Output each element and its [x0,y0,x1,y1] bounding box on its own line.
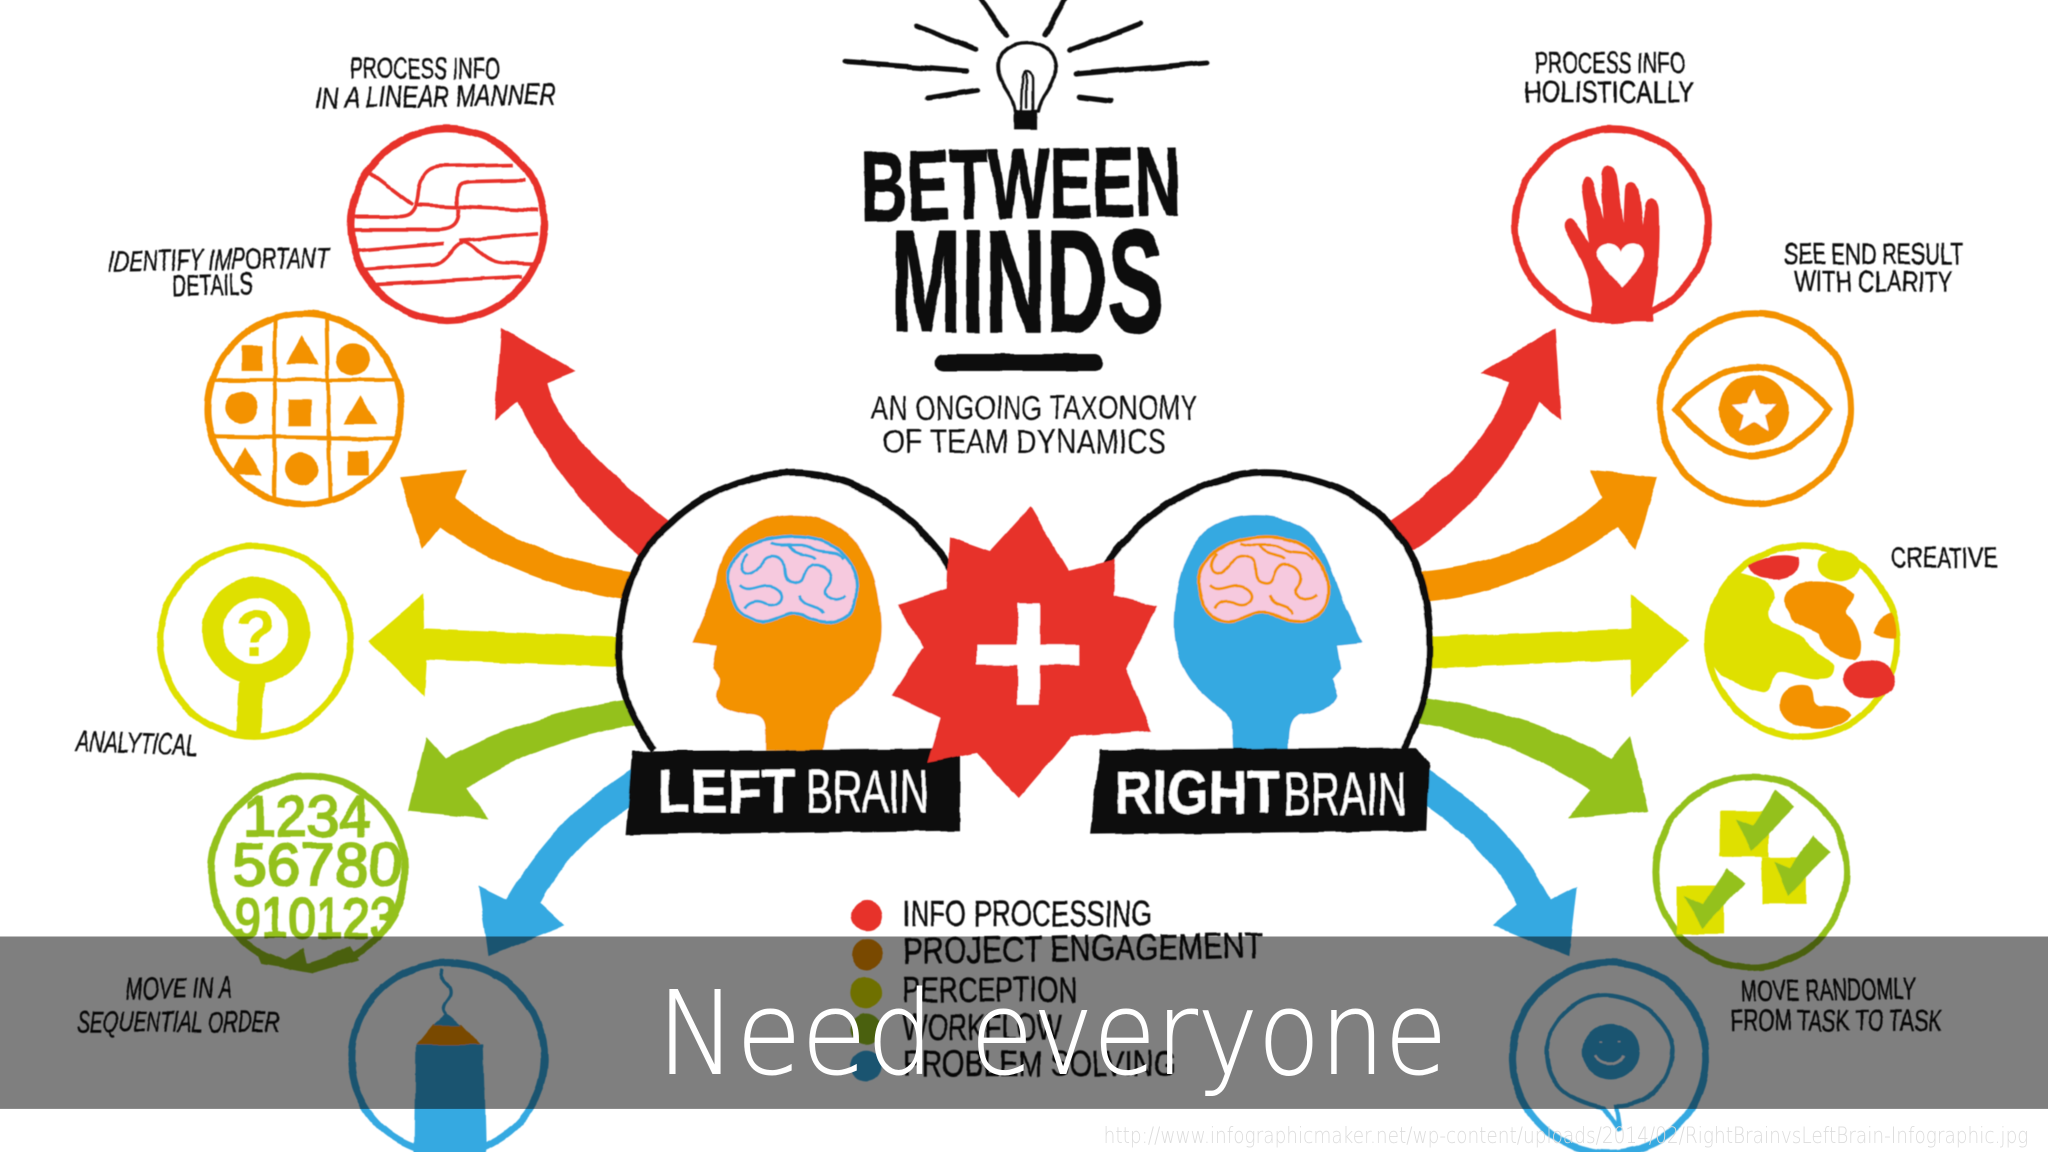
legend labels: PROBLEM SOLVING [903,1043,1176,1084]
icon: red hand circle [1515,129,1708,321]
icon: green numbers circle: 910123 [234,887,397,951]
icon: green numbers circle: 56780 [232,832,402,899]
icon: blue speech bubble circle [1512,963,1706,1152]
red star with plus [892,507,1157,798]
side labels right: SEE END RESULT [1784,238,1963,271]
arrow: green right [1411,696,1648,819]
arrows right [1378,328,1689,956]
arrow: red right [1378,328,1562,555]
subtitle: OF TEAM DYNAMICS [883,423,1166,461]
icon: orange shape grid circle [208,313,401,504]
icon: yellow magnifier question circle [160,546,351,737]
label: right brain [1091,747,1429,835]
arrows left [368,328,679,956]
left head silhouette [692,515,881,750]
lightbulb icon with rays [845,0,1207,129]
left head dome [619,473,951,750]
side labels right: CREATIVE [1891,542,1997,575]
arrow: orange left [400,470,640,602]
arrow: orange right [1417,470,1657,602]
label: left brain [626,748,960,835]
right brain [1199,537,1329,622]
title: Between Minds: MINDS [891,200,1164,363]
side labels left: DETAILS [172,268,254,303]
side labels right: WITH CLARITY [1795,265,1953,298]
arrow: green left [408,699,640,819]
side labels left: PROCESS INFO [350,52,500,85]
side labels right: HOLISTICALLY [1524,76,1694,109]
caption overlay band [0,936,2048,1109]
title: Between Minds [860,126,1182,363]
icon: blue pencil circle [351,963,545,1152]
legend [850,893,1263,1084]
left brain [728,537,857,622]
side labels right [1524,47,1997,1038]
caption: Need everyone: everyone [970,968,1447,1102]
icon: creative paint blobs circle [1706,546,1898,737]
side labels left: IDENTIFY IMPORTANT [108,242,331,279]
title underline bar [935,354,1102,371]
icon: orange eye circle [1660,313,1851,504]
label: left brain: BRAIN [806,757,929,826]
legend labels: PERCEPTION [903,969,1078,1010]
icon: yellow magnifier question circle: ? [236,597,276,670]
legend labels: PROJECT ENGAGEMENT [902,925,1263,972]
side labels left [74,52,556,1039]
legend labels: INFO PROCESSING [903,893,1152,934]
side labels right: MOVE RANDOMLY [1741,973,1916,1009]
arrow: blue left [479,764,640,956]
side labels right: PROCESS INFO [1535,47,1685,80]
legend dots [850,900,883,1081]
legend labels [902,893,1263,1084]
side labels left: SEQUENTIAL ORDER [77,1006,280,1039]
legend labels: WORKFLOW [903,1007,1062,1048]
title: Between Minds: BETWEEN [860,126,1182,243]
right head dome [1104,473,1430,750]
icon: green checkmarks circle [1656,777,1846,967]
subtitle: AN ONGOING TAXONOMY [871,389,1198,427]
side labels left: ANALYTICAL [74,725,198,762]
right head silhouette [1174,515,1362,750]
arrow: blue right [1417,764,1577,956]
subtitle [871,389,1198,461]
label: right brain: RIGHT [1114,759,1280,828]
label: right brain: BRAIN [1284,760,1407,829]
icon: green numbers circle [212,776,405,973]
label: left brain: LEFT [657,757,795,826]
icon: green numbers circle: 1234 [243,785,371,849]
side labels left: IN A LINEAR MANNER [316,78,556,115]
caption: Need everyone: Need [657,968,934,1102]
arrow: yellow left [368,594,627,697]
arrow: yellow right [1424,594,1689,697]
side labels right: FROM TASK TO TASK [1731,1005,1942,1038]
arrow: red left [495,328,679,562]
side labels left: MOVE IN A [125,971,233,1006]
icon: red linear lines circle [350,129,544,320]
